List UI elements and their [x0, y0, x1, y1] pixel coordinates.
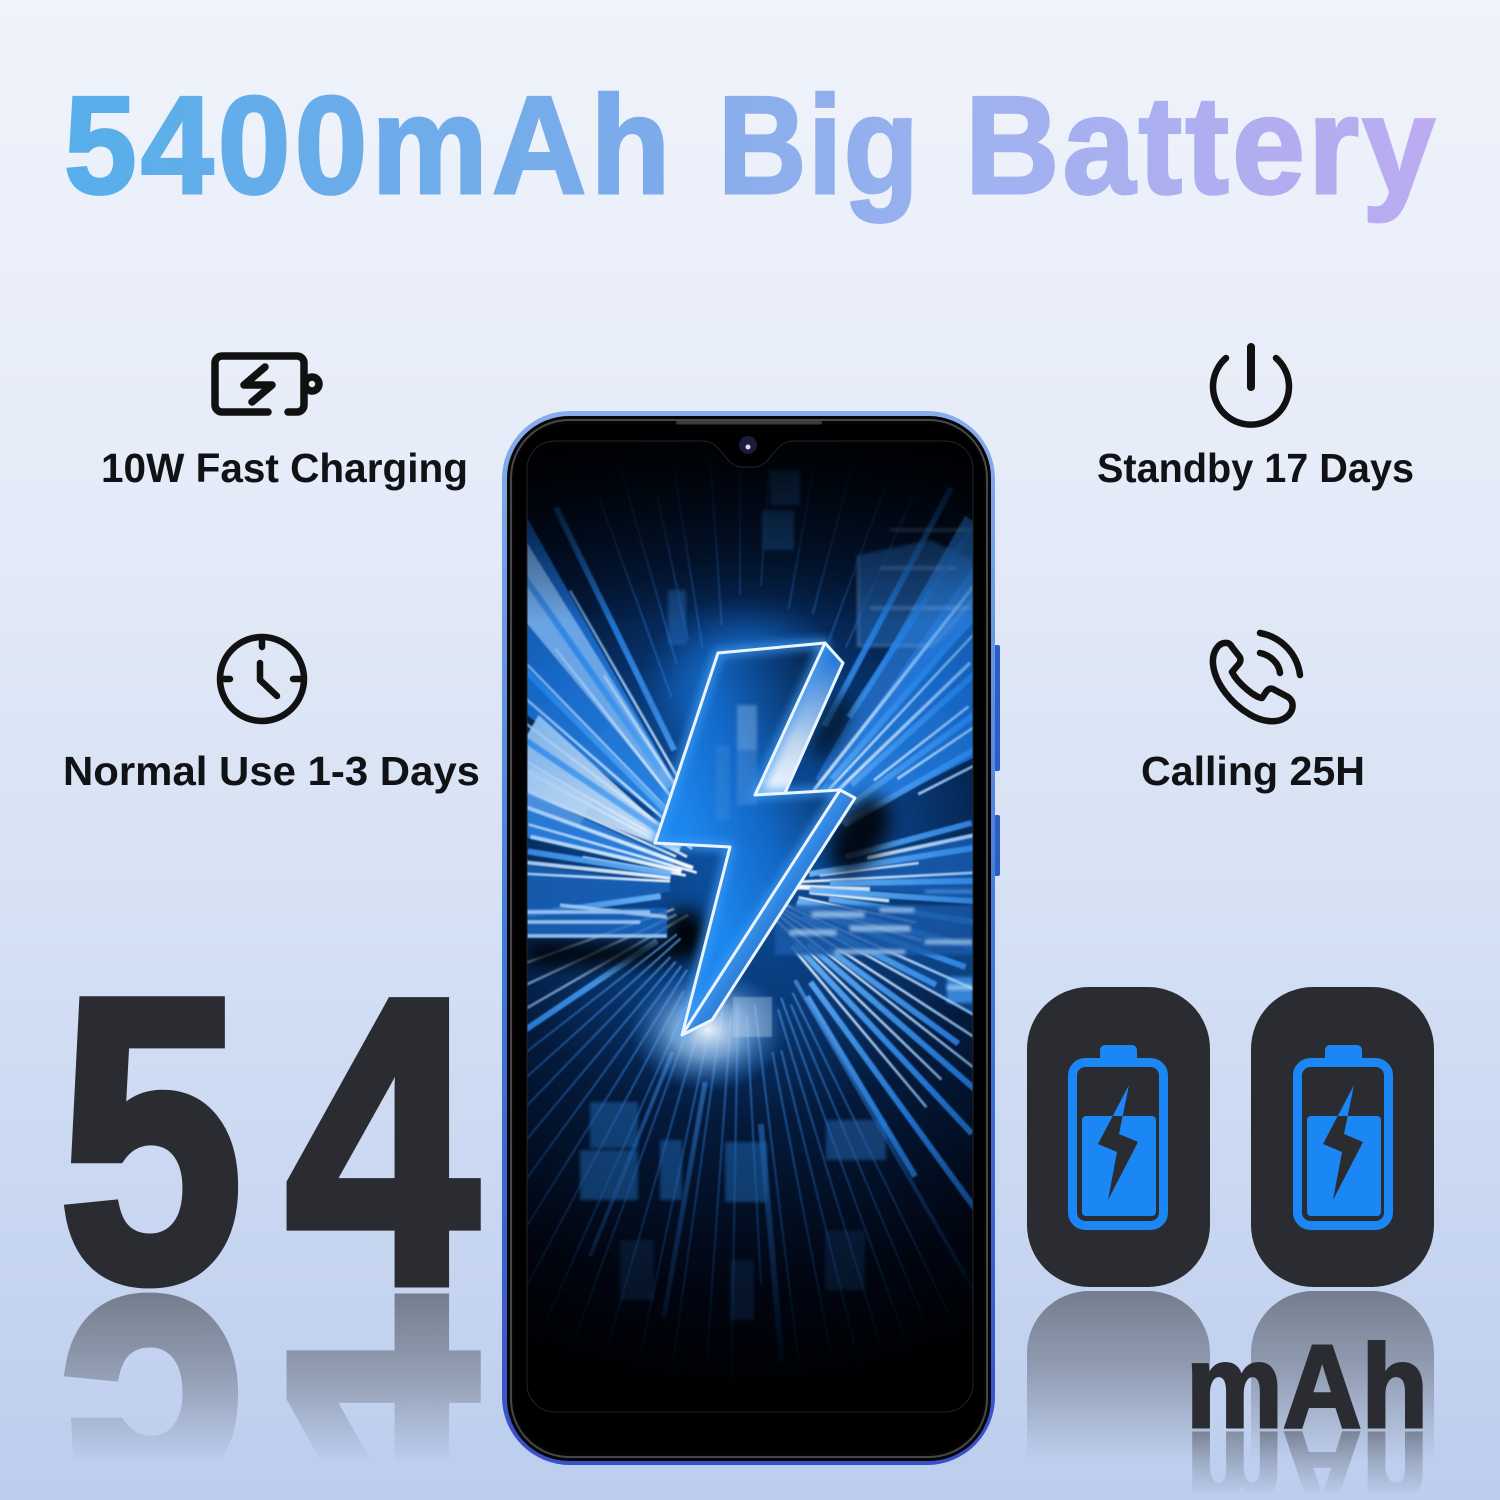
side buttons [994, 645, 1000, 876]
right side city bands [775, 890, 973, 990]
icon: clock [220, 637, 304, 721]
label: 10W Fast Charging: 10W Fast Charging [101, 445, 468, 491]
big number 54 with reflection: 4 [286, 915, 478, 1369]
feature: standby [1097, 347, 1414, 491]
screen hairline [527, 441, 973, 1412]
upper darkening [527, 441, 973, 621]
building blocks [580, 470, 973, 1320]
screen wallpaper [528, 448, 972, 1378]
left horizontal city bars [527, 905, 667, 938]
title: Big [718, 67, 920, 223]
label: Normal Use 1-3 Days: Normal Use 1-3 Days [63, 748, 480, 794]
unit label mAh with reflection: mAh [1186, 1321, 1428, 1453]
phone body [502, 411, 995, 1465]
title: 5400mAh [64, 67, 675, 223]
dark patches [527, 689, 902, 966]
bolt glow [646, 602, 846, 754]
big number 54 with reflection: 5 [59, 915, 243, 1365]
icon: power [1213, 347, 1289, 425]
title [64, 67, 1438, 223]
light burst wedges [528, 515, 972, 1017]
label: Calling 25H: Calling 25H [1141, 748, 1365, 794]
label: Standby 17 Days: Standby 17 Days [1097, 445, 1414, 491]
icon: charging battery [215, 356, 319, 412]
icon: battery with bolt [1072, 1045, 1164, 1226]
battery tile left [1027, 987, 1210, 1287]
earpiece [676, 421, 822, 424]
bright rays [528, 584, 972, 1108]
feature: normal use [63, 637, 480, 794]
icon: battery with bolt [1298, 1045, 1388, 1226]
blue rays [528, 486, 972, 1212]
phone [502, 411, 1000, 1465]
big number 54 with reflection [59, 915, 481, 1451]
title: Battery [965, 67, 1438, 223]
dim rays: top and bottom [528, 481, 972, 1365]
feature: 10W fast charging [101, 356, 468, 491]
battery tile right [1251, 987, 1434, 1287]
reflection of battery tiles [1027, 1291, 1434, 1448]
icon: phone handset [1213, 633, 1300, 721]
lightning bolt [655, 643, 855, 1037]
front camera [739, 436, 757, 454]
feature: calling [1141, 633, 1365, 794]
